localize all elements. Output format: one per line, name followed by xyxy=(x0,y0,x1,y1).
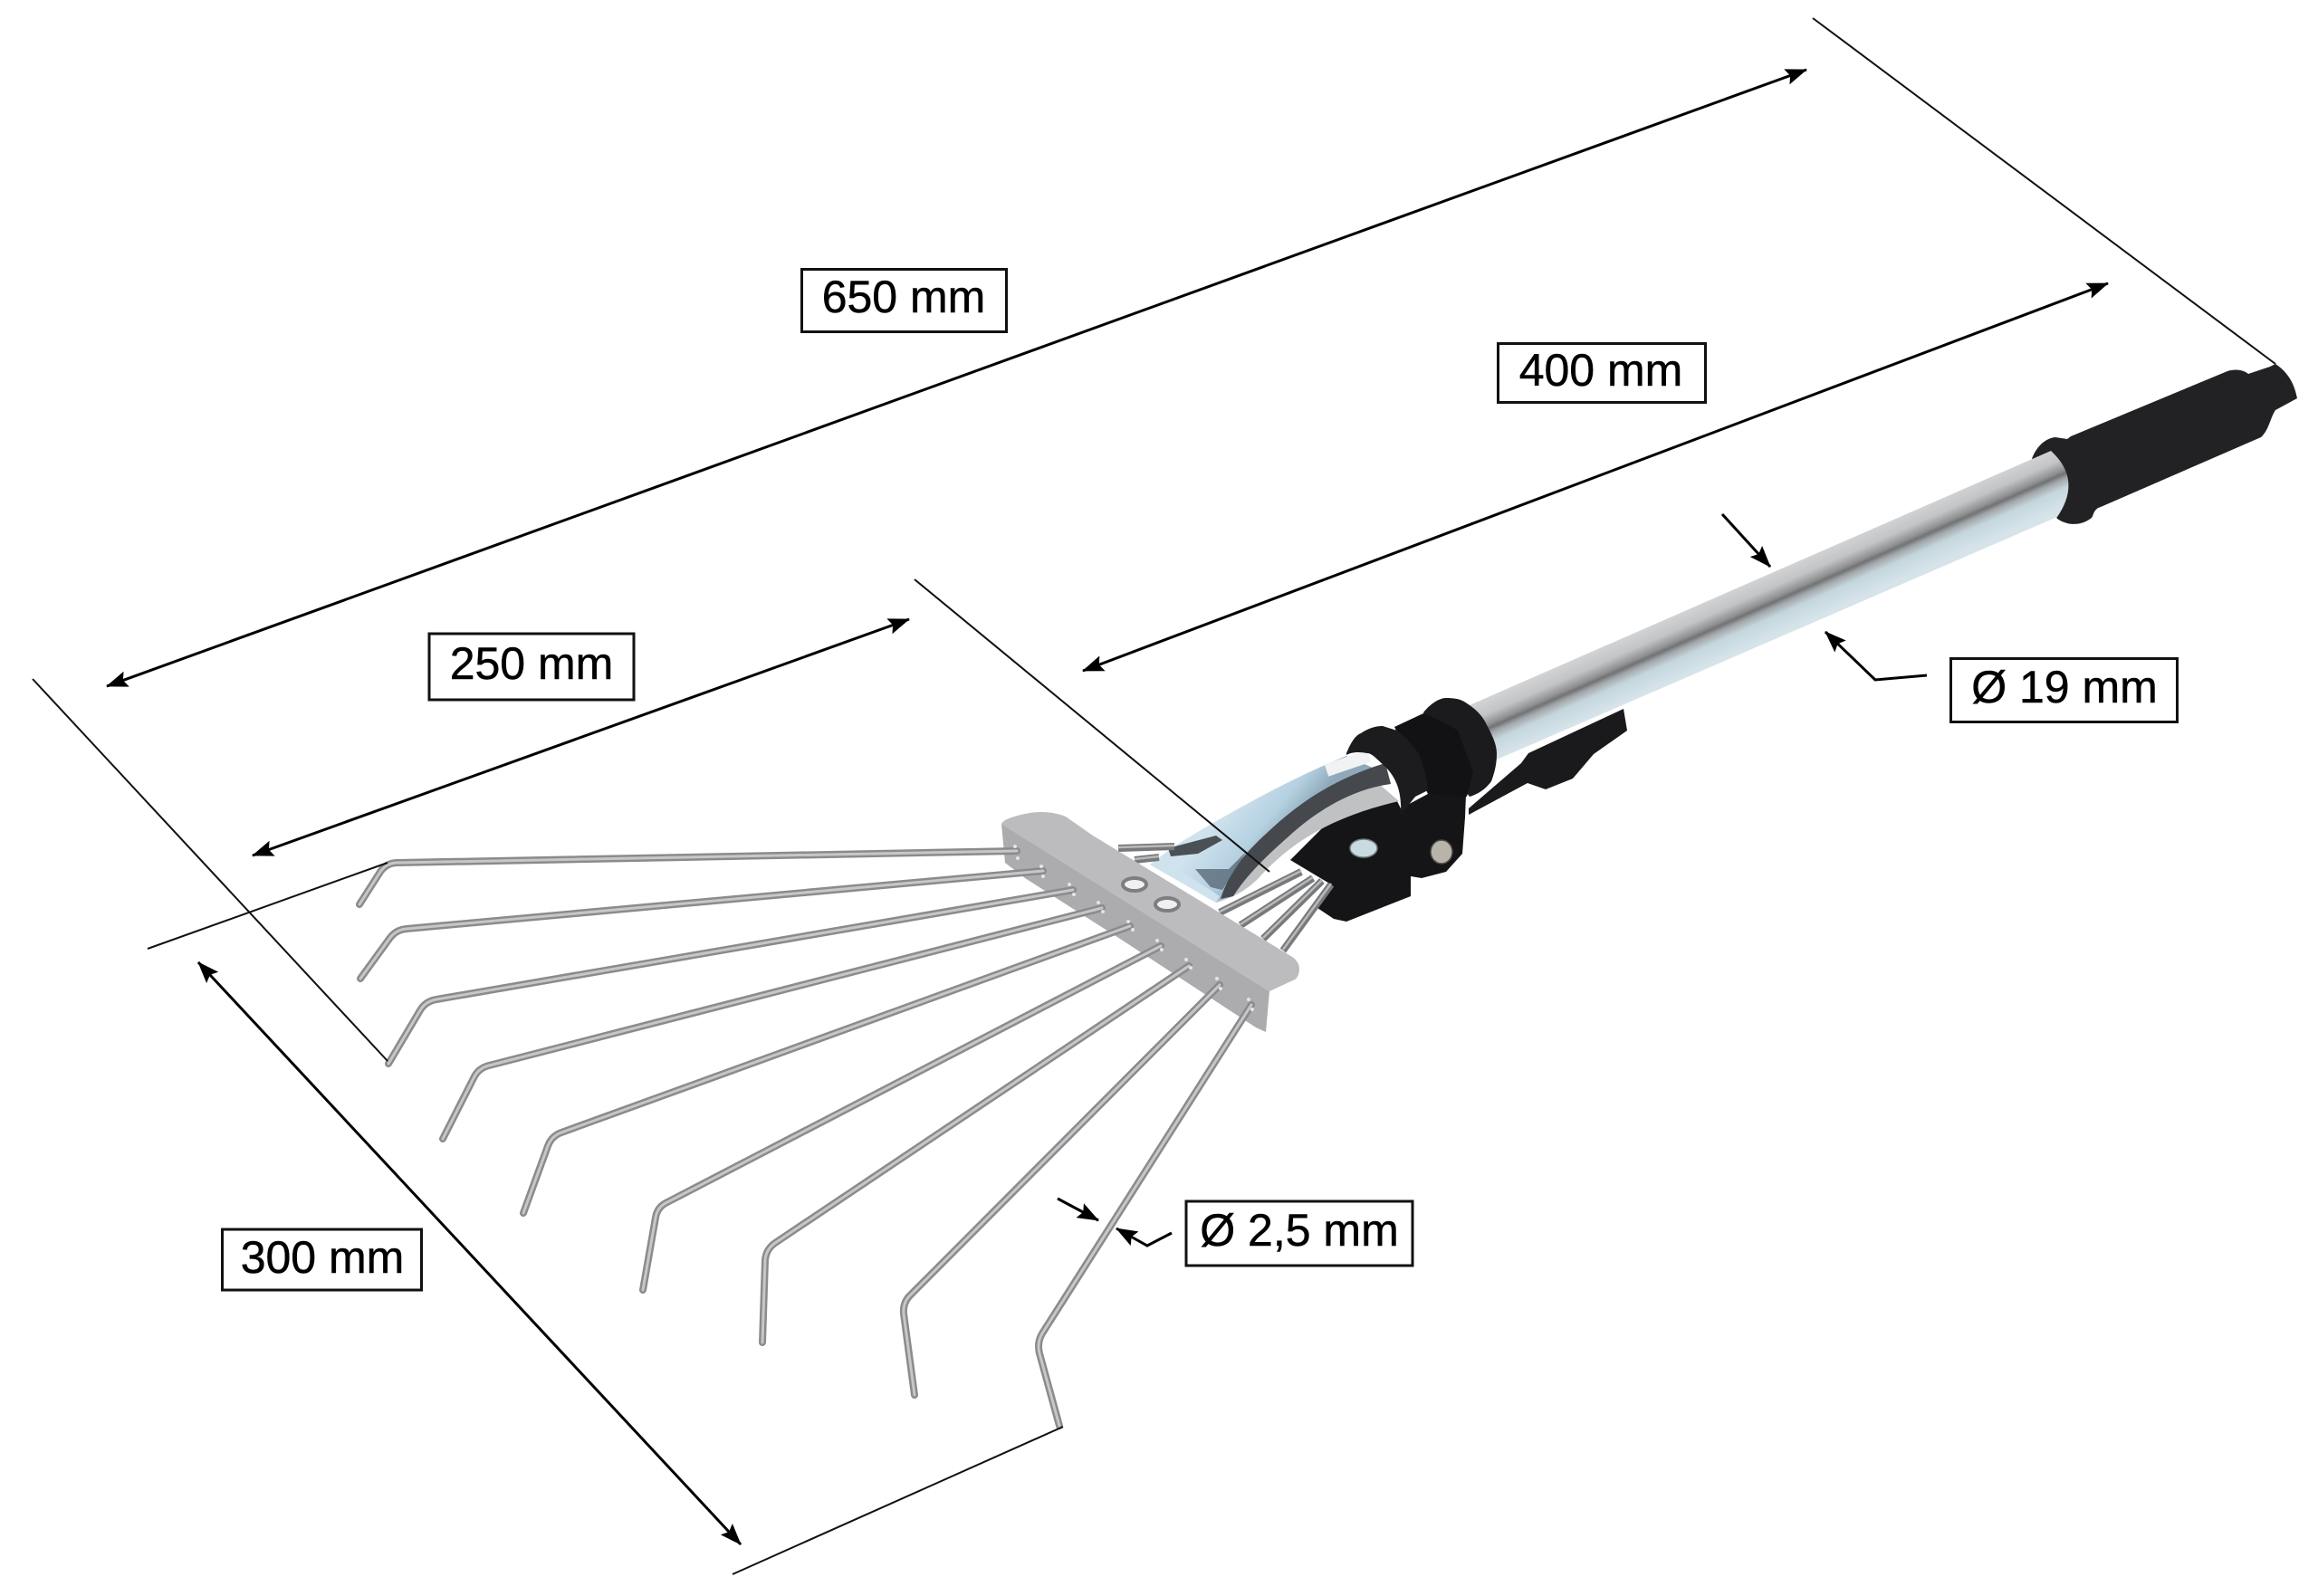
lever xyxy=(1469,709,1627,815)
label: 650 mm: 650 mm xyxy=(822,272,985,322)
label: 400 mm xyxy=(1498,344,1706,402)
tine 2 xyxy=(360,871,1043,979)
label: tube diameter xyxy=(1950,659,2177,722)
grip xyxy=(2032,364,2297,524)
label: wire diameter xyxy=(1186,1201,1413,1266)
screw xyxy=(1350,839,1377,857)
arrows: tube diameter xyxy=(1722,514,1927,680)
label: tube diameter: Ø 19 mm xyxy=(1971,662,2158,712)
collar body xyxy=(1394,713,1473,797)
tine mounting holes xyxy=(1013,845,1254,1011)
label: 400 mm: 400 mm xyxy=(1519,345,1682,396)
label: 650 mm xyxy=(802,270,1007,331)
arrow: 400 mm xyxy=(1083,283,2108,671)
label: wire diameter: Ø 2,5 mm xyxy=(1200,1205,1399,1256)
head plate xyxy=(1001,812,1299,1032)
label: 250 mm: 250 mm xyxy=(450,638,613,689)
tine 9 xyxy=(1039,1005,1251,1426)
tine 5 xyxy=(523,926,1130,1213)
tine 6 xyxy=(643,946,1161,1290)
tine 1 xyxy=(359,851,1017,904)
tine 3 xyxy=(388,890,1073,1064)
plate top face xyxy=(1001,812,1299,991)
tine 8 xyxy=(904,985,1220,1395)
straight tube xyxy=(1449,451,2068,780)
bent tube end xyxy=(1150,756,1399,903)
label: 300 mm xyxy=(223,1229,422,1290)
tine 7 xyxy=(762,966,1189,1343)
clamp bracket xyxy=(1290,772,1467,922)
clamp collars xyxy=(1346,698,1497,815)
arrow: 250 mm xyxy=(253,619,909,855)
plate side face xyxy=(1001,824,1269,1032)
label: 250 mm xyxy=(429,634,634,700)
tine stubs behind plate xyxy=(1118,846,1331,951)
rake illustration xyxy=(359,364,2297,1426)
grip body and flange xyxy=(2032,364,2297,524)
right collar xyxy=(1423,698,1497,797)
arrows: wire diameter xyxy=(1058,1199,1172,1246)
rivet xyxy=(1431,840,1452,864)
label: 300 mm: 300 mm xyxy=(241,1232,404,1283)
tine 4 xyxy=(443,908,1102,1139)
plate holes xyxy=(1123,878,1146,891)
arrow: 300 mm xyxy=(198,962,741,1544)
left collar xyxy=(1346,726,1428,815)
arrow: 650 mm xyxy=(107,70,1806,686)
